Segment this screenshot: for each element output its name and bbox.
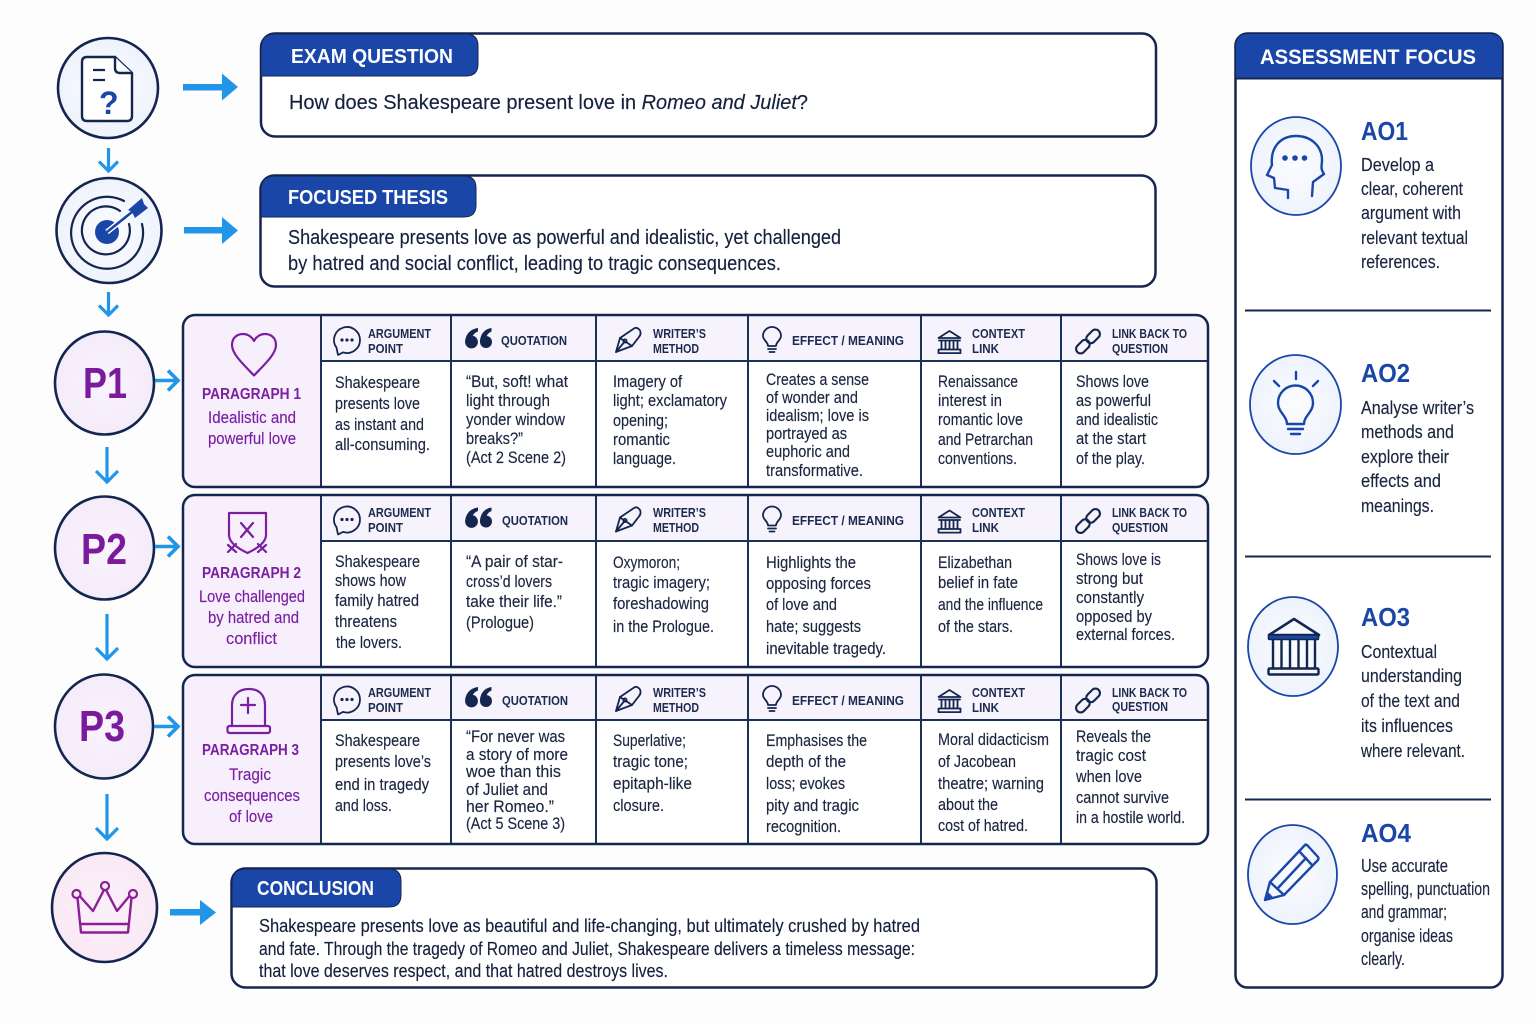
text: link back to question: [1076, 551, 1175, 644]
heading: conclusion: [232, 869, 401, 907]
text: context link: cost of hatred.: [938, 817, 1028, 835]
heading: writer's method: [653, 685, 706, 715]
text: argument point: presents love: [335, 395, 420, 413]
heading: link back to question: LINK BACK TO: [1112, 326, 1187, 341]
heading: context link: [972, 685, 1025, 715]
panel: conclusion: [232, 868, 1156, 988]
text: effect / meaning: Highlights the: [766, 554, 856, 572]
text: writer's method: [613, 732, 692, 815]
icon: fountain pen: [616, 507, 641, 532]
heading: writer's method: [653, 505, 706, 535]
text: quotation: (Prologue): [466, 614, 534, 632]
panel: paragraph 3 row: [183, 675, 1208, 844]
text: AO1: clear, coherent: [1361, 179, 1463, 199]
text: paragraph 1 label: PARAGRAPH 1: [202, 386, 301, 403]
text: quotation: “But, soft! what: [466, 373, 568, 391]
text: AO2: methods and: [1361, 422, 1454, 442]
text: writer's method: Imagery of: [613, 373, 682, 391]
icon: quotation marks: [465, 508, 492, 528]
text: argument point: Shakespeare: [335, 732, 420, 750]
text: paragraph 1 label: Idealistic and: [208, 408, 296, 427]
text: effect / meaning: hate; suggests: [766, 618, 861, 636]
text: effect / meaning: idealism; love is: [766, 407, 869, 425]
text: link back to question: opposed by: [1076, 608, 1153, 626]
text: quotation: of Juliet and: [466, 781, 548, 799]
text: quotation: yonder window: [466, 411, 565, 429]
icon: P3 circle: [55, 674, 153, 778]
text: effect / meaning: depth of the: [766, 753, 846, 771]
icon: speech bubble: [334, 687, 360, 714]
arrow: P1 to paragraph 1 row: [155, 370, 178, 390]
heading: link back to question: QUESTION: [1112, 520, 1168, 535]
text: paragraph 3 label: PARAGRAPH 3: [202, 742, 299, 759]
heading: focused thesis: FOCUSED THESIS: [288, 187, 448, 209]
heading: effect / meaning: EFFECT / MEANING: [792, 513, 904, 528]
text: AO4: clearly.: [1361, 949, 1405, 969]
text: link back to question: tragic cost: [1076, 747, 1146, 765]
heading: context link: CONTEXT: [972, 505, 1025, 520]
text: thesis statement: Shakespeare presents love as powerful and idealistic, yet challenged: [288, 227, 841, 249]
icon: P2 circle: [55, 496, 154, 600]
heading: context link: [972, 326, 1025, 356]
heading: quotation: QUOTATION: [502, 513, 568, 528]
text: writer's method: tragic tone;: [613, 753, 688, 771]
icon: shield with crossed swords: [228, 513, 266, 553]
text: argument point: the lovers.: [336, 634, 402, 652]
text: quotation: take their life.”: [466, 593, 562, 611]
heading: writer's method: METHOD: [653, 341, 699, 356]
text: effect / meaning: [766, 371, 869, 480]
text: link back to question: Reveals the: [1076, 728, 1151, 746]
heading: exam question: EXAM QUESTION: [291, 46, 453, 68]
heading: writer's method: WRITER’S: [653, 326, 706, 341]
text: context link: Moral didacticism: [938, 731, 1049, 749]
heading: context link: LINK: [972, 520, 1000, 535]
text: writer's method: foreshadowing: [613, 595, 709, 613]
text: argument point: end in tragedy: [335, 776, 430, 794]
icon: speech bubble: [334, 327, 360, 355]
heading: link back to question: [1112, 326, 1187, 356]
heading: writer's method: WRITER’S: [653, 505, 706, 520]
text: AO2: [1361, 358, 1474, 516]
heading: exam question: [261, 34, 478, 76]
text: paragraph 1 label: [202, 386, 301, 448]
text: quotation: a story of more: [466, 746, 568, 764]
text: link back to question: of the play.: [1076, 450, 1145, 468]
text: quotation: breaks?”: [466, 430, 523, 448]
text: AO1: [1361, 116, 1468, 272]
heading: link back to question: LINK BACK TO: [1112, 685, 1187, 700]
text: effect / meaning: portrayed as: [766, 425, 847, 443]
text: argument point: shows how: [335, 572, 406, 590]
text: writer's method: tragic imagery;: [613, 574, 710, 592]
text: context link: about the: [938, 796, 998, 814]
text: effect / meaning: [766, 732, 867, 836]
text: argument point: [335, 732, 431, 815]
text: AO3: AO3: [1361, 602, 1410, 632]
text: argument point: [335, 374, 430, 454]
arrow: to focused thesis: [184, 217, 238, 244]
panel: assessment focus: [1236, 34, 1502, 988]
text: paragraph 1 label: powerful love: [208, 429, 296, 448]
icon: light bulb with rays: [1250, 355, 1341, 454]
text: link back to question: in a hostile world.: [1076, 809, 1185, 827]
text: paragraph 2 label: Love challenged: [199, 587, 305, 606]
text: writer's method: Superlative;: [613, 732, 686, 750]
text: link back to question: [1075, 728, 1185, 827]
text: writer's method: in the Prologue.: [613, 618, 714, 636]
text: writer's method: closure.: [613, 797, 664, 815]
text: quotation: [466, 553, 563, 632]
text: AO1: argument with: [1361, 203, 1461, 223]
panel: focused thesis: [260, 176, 1156, 286]
icon: chain link: [1074, 328, 1102, 355]
text: link back to question: [1076, 373, 1158, 468]
text: AO3: understanding: [1361, 666, 1462, 686]
heading: argument point: [368, 505, 431, 535]
icon: P1 circle: P1: [83, 359, 127, 408]
text: writer's method: [613, 554, 714, 636]
arrow: down to paragraph 1: [99, 292, 118, 315]
icon: classical building: [938, 331, 960, 353]
text: argument point: all-consuming.: [335, 436, 430, 454]
heading: argument point: [368, 685, 431, 715]
text: argument point: and loss.: [335, 797, 392, 815]
icon: light bulb: [763, 686, 781, 711]
text: writer's method: romantic: [613, 431, 670, 449]
heading: quotation: QUOTATION: [501, 333, 567, 348]
text: link back to question: constantly: [1076, 589, 1145, 607]
text: link back to question: and idealistic: [1076, 411, 1158, 429]
text: conclusion statement: Shakespeare presents love as beautiful and life-changing, but ultimately crushed by hatred: [259, 915, 920, 936]
heading: writer's method: METHOD: [653, 520, 699, 535]
heading: assessment focus: ASSESSMENT FOCUS: [1260, 45, 1476, 69]
text: the question: How does Shakespeare present love in Romeo and Juliet?: [289, 91, 808, 114]
text: AO2: AO2: [1361, 358, 1410, 388]
text: AO3: Contextual: [1361, 642, 1437, 662]
arrow: down to P3: [96, 614, 118, 659]
heading: context link: CONTEXT: [972, 685, 1025, 700]
text: effect / meaning: Creates a sense: [766, 371, 869, 389]
heading: link back to question: [1112, 505, 1187, 535]
text: context link: of Jacobean: [938, 753, 1016, 771]
heading: link back to question: QUESTION: [1112, 341, 1168, 356]
text: argument point: Shakespeare: [335, 374, 420, 392]
text: argument point: presents love’s: [335, 753, 431, 771]
text: paragraph 2 label: conflict: [226, 629, 277, 648]
heading: argument point: ARGUMENT: [368, 685, 431, 700]
text: AO3: where relevant.: [1360, 741, 1465, 761]
heading: context link: CONTEXT: [972, 326, 1025, 341]
icon: pencil: [1248, 825, 1337, 924]
text: quotation: [466, 373, 568, 467]
text: effect / meaning: euphoric and: [766, 443, 850, 461]
icon: head with thought dots: [1251, 117, 1341, 215]
text: effect / meaning: transformative.: [766, 462, 863, 480]
text: paragraph 3 label: consequences: [204, 786, 300, 805]
text: quotation: “A pair of star-: [466, 553, 563, 571]
text: link back to question: at the start: [1076, 430, 1146, 448]
text: writer's method: light; exclamatory: [613, 392, 728, 410]
text: effect / meaning: opposing forces: [766, 575, 871, 593]
text: quotation: woe than this: [465, 763, 561, 781]
heading: context link: LINK: [972, 341, 1000, 356]
text: AO1: relevant textual: [1361, 228, 1468, 248]
panel: paragraph 2 row: [183, 495, 1208, 667]
text: writer's method: Oxymoron;: [613, 554, 680, 572]
text: effect / meaning: of wonder and: [766, 389, 858, 407]
text: AO2: explore their: [1361, 447, 1449, 467]
heading: argument point: ARGUMENT: [368, 505, 431, 520]
heading: effect / meaning: EFFECT / MEANING: [792, 693, 904, 708]
text: AO2: meanings.: [1361, 496, 1434, 516]
icon: chain link: [1074, 507, 1102, 535]
text: paragraph 2 label: PARAGRAPH 2: [202, 565, 301, 582]
heading: argument point: ARGUMENT: [368, 326, 431, 341]
arrow: down to thesis icon: [99, 148, 118, 171]
icon: quotation marks: [465, 687, 492, 707]
text: conclusion statement: that love deserves respect, and that hatred destroys lives.: [259, 960, 668, 981]
text: effect / meaning: [766, 554, 886, 658]
icon: classical building: [938, 690, 960, 712]
icon: fountain pen: [616, 687, 641, 711]
text: quotation: cross’d lovers: [466, 573, 552, 591]
text: paragraph 3 label: of love: [229, 807, 273, 826]
text: AO4: AO4: [1361, 818, 1411, 848]
text: AO1: references.: [1361, 252, 1440, 272]
text: conclusion statement: and fate. Through the tragedy of Romeo and Juliet, Shakespeare delivers a timeless message:: [259, 938, 915, 959]
text: effect / meaning: pity and tragic: [766, 797, 859, 815]
text: writer's method: language.: [613, 450, 676, 468]
text: context link: Renaissance: [938, 373, 1018, 391]
heading: context link: [972, 505, 1025, 535]
arrow: down to conclusion icon: [96, 794, 118, 839]
icon: fountain pen: [616, 328, 641, 352]
text: AO4: and grammar;: [1361, 902, 1447, 922]
text: effect / meaning: Emphasises the: [766, 732, 867, 750]
text: AO4: [1361, 818, 1490, 969]
text: link back to question: cannot survive: [1076, 789, 1169, 807]
text: link back to question: Shows love: [1076, 373, 1149, 391]
icon: quotation marks: [465, 328, 492, 348]
heading: link back to question: QUESTION: [1112, 699, 1168, 714]
text: context link: theatre; warning: [938, 775, 1044, 793]
arrow: down to P2: [96, 447, 118, 482]
text: paragraph 3 label: Tragic: [229, 765, 271, 784]
text: context link: and Petrarchan: [938, 431, 1033, 449]
heading: argument point: [368, 326, 431, 356]
text: effect / meaning: inevitable tragedy.: [766, 640, 886, 658]
text: effect / meaning: recognition.: [766, 818, 841, 836]
text: link back to question: as powerful: [1076, 392, 1151, 410]
text: context link: Elizabethan: [938, 554, 1012, 572]
text: writer's method: opening;: [613, 412, 668, 430]
text: AO3: its influences: [1361, 716, 1453, 736]
text: writer's method: [613, 373, 728, 468]
icon: P3 circle: P3: [79, 702, 125, 751]
text: quotation: light through: [466, 392, 550, 410]
text: AO2: effects and: [1361, 471, 1441, 491]
text: argument point: [335, 553, 420, 652]
text: conclusion statement: [259, 915, 920, 981]
icon: light bulb: [763, 506, 781, 532]
icon: light bulb: [763, 327, 781, 352]
heading: conclusion: CONCLUSION: [257, 878, 374, 900]
text: quotation: “For never was: [466, 728, 565, 746]
text: AO1: AO1: [1361, 116, 1408, 146]
panel: paragraph 1 row: [183, 315, 1208, 487]
text: quotation: (Act 5 Scene 3): [466, 815, 565, 833]
icon: chain link: [1074, 687, 1102, 714]
text: effect / meaning: loss; evokes: [766, 775, 845, 793]
text: paragraph 3 label: [202, 742, 300, 826]
heading: link back to question: [1112, 685, 1187, 714]
text: quotation: her Romeo.”: [466, 798, 554, 816]
text: AO4: organise ideas: [1361, 926, 1453, 946]
icon: speech bubble: [334, 507, 360, 534]
heading: argument point: POINT: [368, 700, 403, 715]
text: effect / meaning: of love and: [766, 596, 837, 614]
icon: P1 circle: [55, 332, 154, 434]
panel: exam question: [261, 34, 1156, 136]
text: AO1: Develop a: [1361, 155, 1435, 175]
text: AO4: spelling, punctuation: [1361, 879, 1490, 899]
arrow: P2 to paragraph 2 row: [155, 536, 178, 556]
text: link back to question: when love: [1075, 768, 1142, 786]
text: argument point: threatens: [335, 613, 397, 631]
text: paragraph 2 label: [199, 565, 305, 648]
heading: writer's method: [653, 326, 706, 356]
text: thesis statement: [288, 227, 841, 275]
text: thesis statement: by hatred and social conflict, leading to tragic consequences.: [288, 253, 781, 275]
text: context link: and the influence: [938, 596, 1043, 614]
icon: classical building: [938, 510, 960, 533]
text: context link: of the stars.: [938, 618, 1013, 636]
text: link back to question: external forces.: [1076, 626, 1175, 644]
icon: exam question document: ?: [99, 85, 119, 121]
heading: argument point: POINT: [368, 341, 403, 356]
text: context link: [938, 554, 1043, 636]
text: context link: conventions.: [938, 450, 1017, 468]
icon: P2 circle: P2: [81, 525, 127, 574]
heading: link back to question: LINK BACK TO: [1112, 505, 1187, 520]
arrow: P3 to paragraph 3 row: [154, 716, 178, 736]
icon: heart: [232, 334, 276, 376]
text: paragraph 2 label: by hatred and: [208, 608, 299, 627]
heading: context link: LINK: [972, 700, 1000, 715]
text: context link: interest in: [938, 392, 1002, 410]
text: context link: romantic love: [938, 411, 1023, 429]
icon: classical building: [1248, 597, 1338, 696]
heading: argument point: POINT: [368, 520, 403, 535]
heading: effect / meaning: EFFECT / MEANING: [792, 333, 904, 348]
arrow: to conclusion: [170, 900, 216, 925]
text: writer's method: epitaph-like: [613, 775, 692, 793]
text: AO3: [1360, 602, 1465, 761]
text: argument point: Shakespeare: [335, 553, 420, 571]
text: AO2: Analyse writer’s: [1361, 398, 1474, 418]
text: context link: belief in fate: [938, 574, 1018, 592]
icon: target with dart: [56, 178, 162, 283]
arrow: to exam question: [183, 74, 238, 100]
icon: exam question document: [58, 38, 158, 138]
heading: assessment focus: [1236, 34, 1502, 78]
text: context link: [938, 373, 1033, 468]
text: argument point: family hatred: [335, 592, 419, 610]
text: AO3: of the text and: [1361, 691, 1460, 711]
text: quotation: [465, 728, 568, 833]
text: AO4: Use accurate: [1361, 856, 1448, 876]
icon: crown circle: [52, 853, 157, 962]
heading: writer's method: METHOD: [653, 700, 699, 715]
icon: gravestone: [228, 689, 270, 733]
text: argument point: as instant and: [335, 416, 424, 434]
text: link back to question: strong but: [1076, 570, 1143, 588]
text: link back to question: Shows love is: [1076, 551, 1161, 569]
text: context link: [938, 731, 1049, 835]
heading: writer's method: WRITER’S: [653, 685, 706, 700]
heading: focused thesis: [261, 176, 476, 217]
heading: quotation: QUOTATION: [502, 693, 568, 708]
text: quotation: (Act 2 Scene 2): [466, 449, 566, 467]
